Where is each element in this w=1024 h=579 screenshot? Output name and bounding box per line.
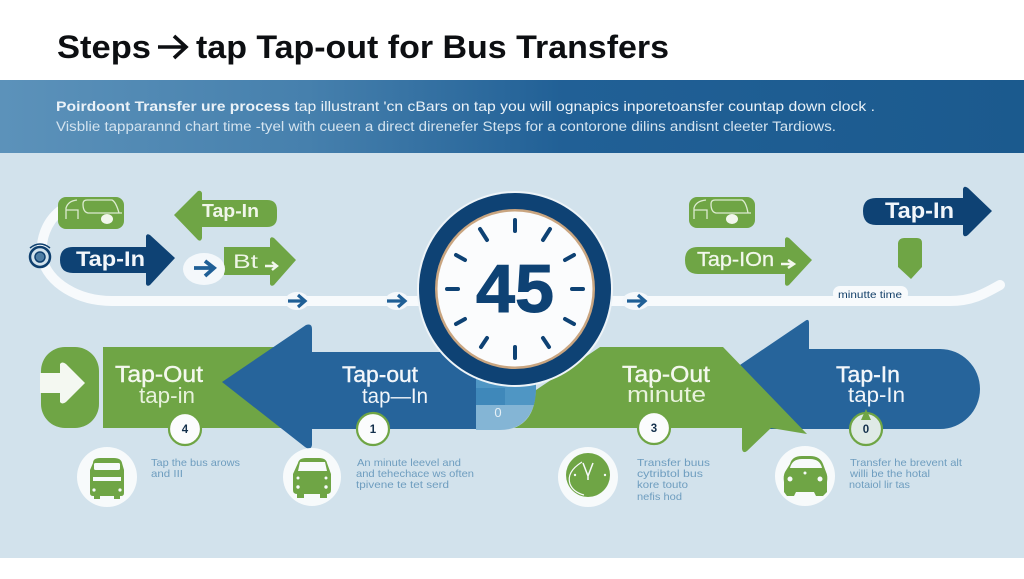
arrow: green Bt xyxy=(224,237,296,286)
text: Tap-Out minute: Tap-Out xyxy=(622,361,711,387)
panel: header band xyxy=(0,80,1024,153)
step 4: green band xyxy=(103,347,300,428)
title: Steps xyxy=(57,29,151,65)
badge 3: 3 xyxy=(651,423,657,435)
clock ticks xyxy=(447,220,583,358)
text: step 3 description: nefis hod xyxy=(637,491,682,503)
icon: car front xyxy=(775,446,835,506)
arrow: navy Tap-In left xyxy=(60,234,175,286)
arrow: navy Tap-In right xyxy=(863,187,992,236)
text: step 3 description: cytribtol bus xyxy=(637,468,703,480)
arrow: green Tap-IOn xyxy=(685,237,812,286)
icon: target marker xyxy=(30,244,50,267)
clock number: 45 xyxy=(476,251,554,327)
text: step 0 description: notaiol lir tas xyxy=(849,479,910,491)
panel: main background xyxy=(0,153,1024,558)
text: step 1 description: An minute leevel and xyxy=(357,457,461,469)
route arrow 2 xyxy=(385,292,409,310)
text: Tap-In tap-In: Tap-In xyxy=(836,362,900,387)
text: step 0 description xyxy=(849,457,962,491)
badge 4: 4 xyxy=(182,424,189,436)
label: minute time xyxy=(833,286,908,301)
text: Tap-Out tap-in xyxy=(115,361,204,408)
text: step 1 description: tpivene te tet serd xyxy=(356,479,449,491)
badge 3 xyxy=(638,412,670,444)
arrow: navy Tap-In right: Tap-In xyxy=(885,198,954,223)
text: step 1 description: and tehechace ws often xyxy=(356,468,474,480)
text: Tap-out tap-In xyxy=(342,362,428,408)
text: Tap-out tap-In: Tap-out xyxy=(342,362,418,387)
icon: green bus outline left xyxy=(58,197,124,229)
text: step 4 description: and III xyxy=(151,468,183,480)
text: Tap-Out minute xyxy=(622,361,711,407)
header text line 1: Poirdoont Transfer ure process tap illustrant 'cn cBars on tap you will ognapics inporetoansfer countap down clock . xyxy=(56,98,875,114)
light blue segment xyxy=(476,352,536,430)
text: Tap-Out tap-in: tap-in xyxy=(139,383,195,408)
step 2 blue arrow right xyxy=(700,320,980,429)
route arrow 3 xyxy=(622,292,650,310)
arrow: green Tap-In left xyxy=(174,191,277,241)
route arrow 1 xyxy=(285,292,309,310)
arrow: green down xyxy=(898,238,922,279)
badge 0 xyxy=(850,409,882,445)
panel: step band xyxy=(40,320,980,452)
icon: clock green xyxy=(558,447,618,507)
arrow: green Tap-IOn: Tap-IOn xyxy=(697,248,774,271)
badge 4 xyxy=(169,413,201,445)
step 3: green arrow xyxy=(514,347,807,452)
title: tap Tap-out for Bus Transfers xyxy=(196,29,669,65)
white route line xyxy=(42,211,1000,301)
arrow: navy Tap-In left: Tap-In xyxy=(76,248,145,271)
badge 1: 1 xyxy=(370,424,377,436)
text: step 3 description: Transfer buus xyxy=(637,457,710,469)
text: step 3 description: kore touto xyxy=(637,479,688,491)
text: Tap-In tap-In: tap-In xyxy=(848,384,905,407)
text: step 4 description xyxy=(151,457,240,480)
badge 1 xyxy=(357,413,389,445)
header text line 2: Visblie tapparannd chart time -tyel with cueen a direct direnefer Steps for a contorone dilins andisnt cleeter Tardiows. xyxy=(56,119,836,134)
text: Tap-out tap-In: tap—In xyxy=(362,385,428,408)
arrow: green Tap-In left: Tap-In xyxy=(202,201,259,221)
icon: bus front 2 xyxy=(283,448,341,506)
icon: green bus outline right xyxy=(689,197,755,228)
text: step 0 description: Transfer he brevent alt xyxy=(850,457,962,469)
light blue segment: 0 xyxy=(494,405,502,420)
text: Tap-Out minute: minute xyxy=(627,382,706,407)
text: step 4 description: Tap the bus arows xyxy=(151,457,240,469)
badge 0: 0 xyxy=(863,424,869,436)
text: step 0 description: willi be the hotal xyxy=(849,468,930,480)
text: step 1 description xyxy=(356,457,474,491)
icon: bus front 1 xyxy=(77,447,137,507)
arrow: green Bt: Bt xyxy=(233,252,259,273)
clock xyxy=(417,191,613,387)
icon: green start pill with arrow xyxy=(40,347,99,428)
step 1: blue arrow xyxy=(222,324,476,449)
text: step 3 description xyxy=(637,457,710,503)
text: Tap-In tap-In xyxy=(836,362,905,407)
text: Tap-Out tap-in: Tap-Out xyxy=(115,361,204,387)
icon: white circle arrow xyxy=(183,253,225,285)
label: minute time: minutte time xyxy=(838,290,903,301)
